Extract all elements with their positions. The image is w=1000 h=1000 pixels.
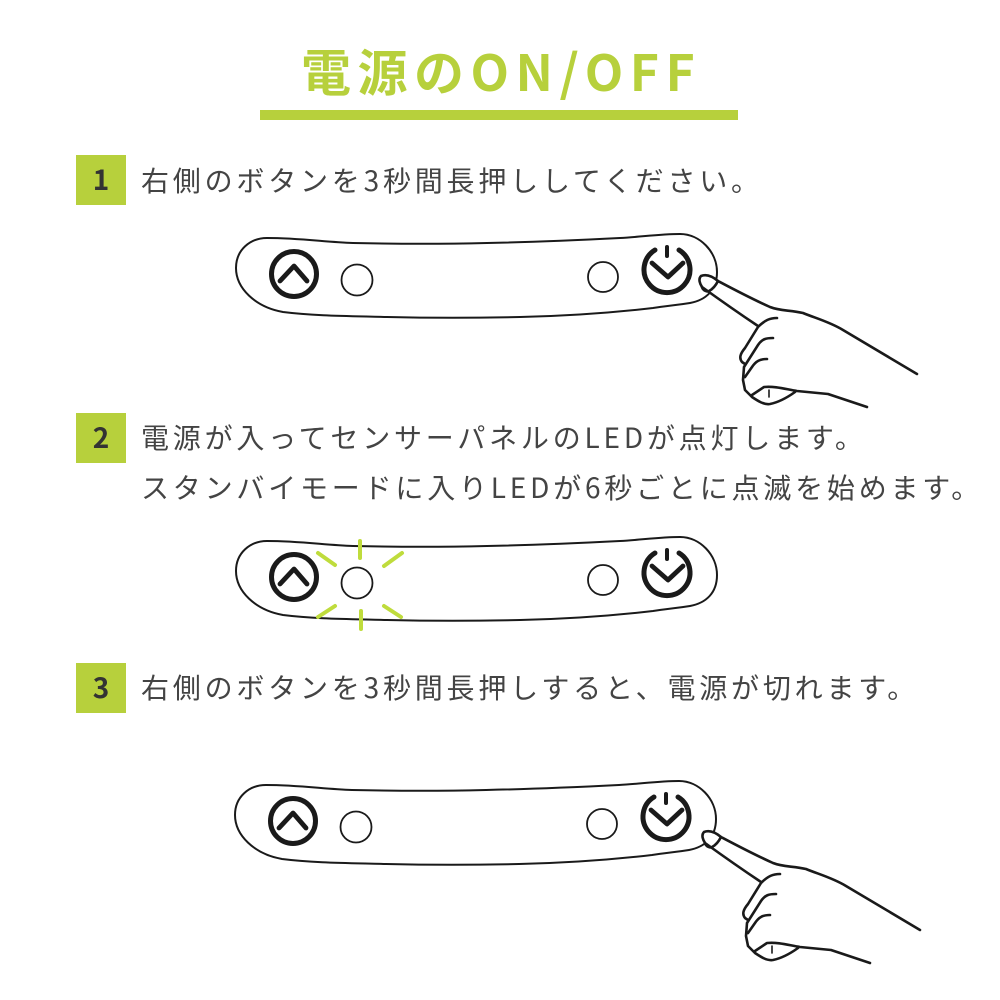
title: 電源のON/OFF: [301, 34, 701, 106]
step 1 number badge: 1: [93, 159, 109, 199]
device panel 1 with finger press: [236, 234, 917, 407]
device panel 3 with finger press: [235, 781, 920, 963]
step 3 number badge: 3: [93, 667, 109, 707]
device panel 2 with blinking LED: [236, 537, 717, 629]
title underline: [260, 110, 738, 120]
step 2 text: [141, 417, 983, 507]
step 2 text: 電源が入ってセンサーパネルのLEDが点灯します。: [141, 417, 867, 457]
step 1 text: 右側のボタンを3秒間長押ししてください。: [141, 160, 763, 200]
step 1 number badge: [76, 155, 126, 205]
step 2 number badge: [76, 413, 126, 463]
icon: LED glow rays: [318, 541, 402, 629]
step 2 number badge: 2: [93, 417, 109, 457]
step 2 text: スタンバイモードに入りLEDが6秒ごとに点滅を始めます。: [141, 467, 983, 507]
step 3 number badge: [76, 663, 126, 713]
step 3 text: 右側のボタンを3秒間長押しすると、電源が切れます。: [141, 667, 919, 707]
